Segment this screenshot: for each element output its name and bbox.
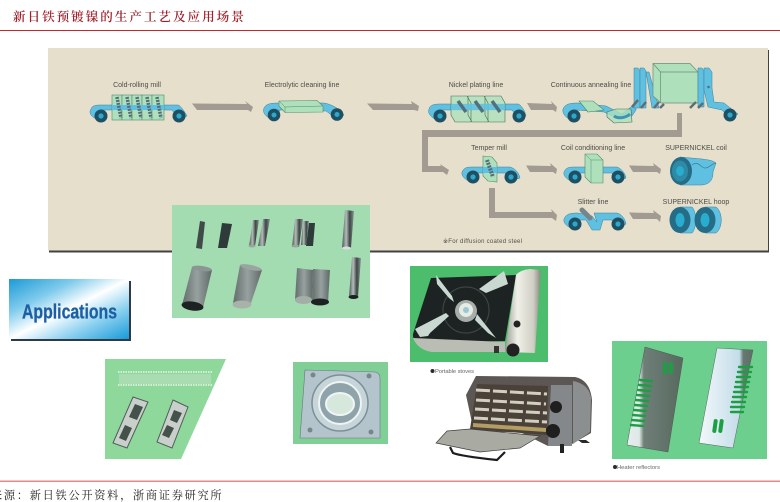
annealing towers, entry side: [632, 68, 664, 108]
arrow: [527, 101, 557, 112]
step: cold-rolling mill: [90, 82, 187, 122]
step: electrolytic cleaning line: [263, 82, 344, 121]
step: coil conditioning line: Coil conditioning line: [561, 145, 625, 152]
photo: metal tubes: [172, 205, 370, 318]
arrow: connector to temper mill: [422, 113, 682, 175]
photo: portable stove: [410, 266, 548, 362]
step: nickel plating line: [429, 82, 526, 122]
note: ※For diffusion coated steel: [443, 238, 522, 245]
annealing furnace: [653, 64, 698, 103]
title: 新日铁预镀镍的生产工艺及应用场景: [13, 9, 246, 24]
step: slitter line: Slitter line: [578, 199, 608, 206]
step: slitter line: [564, 199, 626, 230]
arrow: [629, 210, 661, 222]
step: SUPERNICKEL coil: [665, 145, 727, 185]
label: portable stoves: Portable stoves: [435, 369, 474, 375]
label: heater reflectors: Heater reflectors: [617, 465, 660, 471]
arrow: [192, 101, 253, 112]
photo: toaster oven: [436, 376, 592, 460]
arrow: [526, 163, 557, 174]
step: coil conditioning line: [561, 145, 626, 184]
step: temper mill: Temper mill: [471, 145, 507, 152]
step: cold-rolling mill: Cold-rolling mill: [113, 82, 161, 89]
photo: heater reflectors: [612, 341, 767, 459]
panel: production process: [48, 48, 769, 252]
step: continuous annealing line: [551, 64, 738, 123]
applications badge: Applications: [22, 302, 117, 324]
arrow: [629, 163, 661, 174]
photo: metal plate: [293, 362, 388, 444]
step: SUPERNICKEL coil: SUPERNICKEL coil: [665, 145, 727, 152]
photo: clips: [105, 359, 226, 459]
step: SUPERNICKEL hoop: SUPERNICKEL hoop: [663, 199, 729, 206]
arrow: temper mill to slitter: [489, 188, 557, 221]
step: nickel plating line: Nickel plating line: [449, 82, 503, 89]
step: continuous annealing line: Continuous annealing line: [551, 82, 631, 89]
annealing towers, exit side: [690, 68, 738, 119]
step: electrolytic cleaning line: Electrolytic cleaning line: [265, 82, 339, 89]
step: temper mill: [462, 145, 520, 184]
step: SUPERNICKEL hoop: [663, 199, 729, 233]
arrow: [367, 101, 419, 111]
applications badge: [9, 279, 131, 341]
